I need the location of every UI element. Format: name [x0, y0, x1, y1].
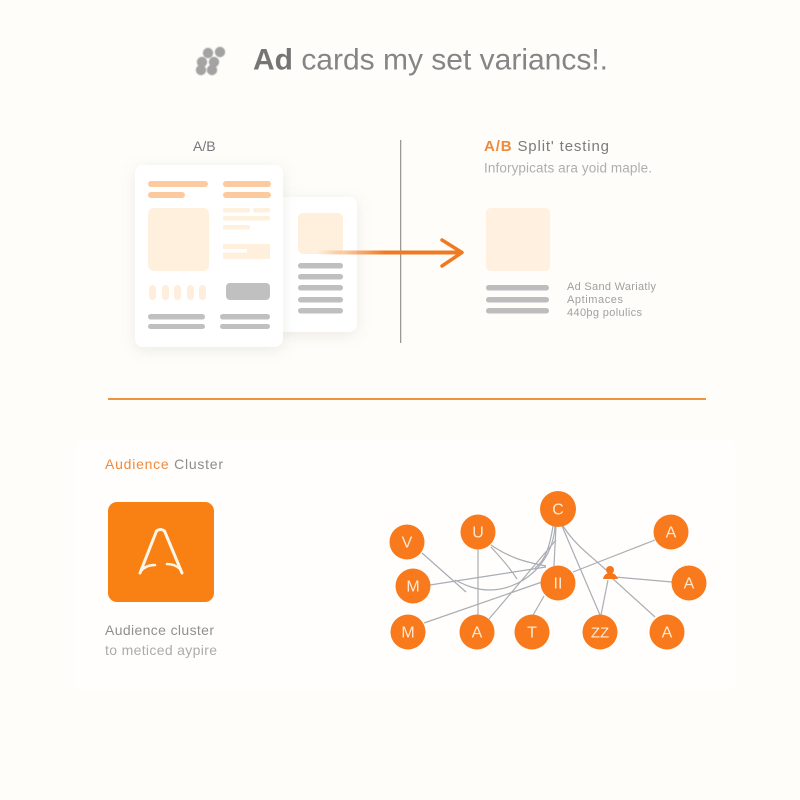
node: T [514, 614, 550, 650]
variant image [486, 208, 550, 271]
node: T: T [527, 624, 537, 642]
secondary card image [298, 213, 343, 254]
node: A lower left: A [472, 624, 483, 642]
node: A lower left [460, 614, 494, 650]
title: Ad cards my set variancs!. [253, 44, 608, 76]
variant text lines [486, 285, 549, 314]
divider: horizontal orange [108, 398, 706, 400]
node: A middle right: A [684, 576, 695, 592]
node: A upper right [654, 514, 688, 550]
node: C: C [552, 502, 564, 518]
caption: subtext: to meticed aypire [105, 642, 217, 658]
node: A lower right: A [662, 624, 673, 642]
subheading: Inforypicats ara yoid maple. [484, 160, 652, 176]
main card button [226, 283, 270, 300]
main card pills [149, 285, 206, 300]
main card copy lines [223, 208, 270, 259]
node: V: V [402, 534, 413, 552]
variant caption [567, 281, 656, 319]
secondary card text lines [298, 263, 343, 314]
variant caption: Ad Sand Wariatly [567, 281, 656, 293]
main card heading bars [148, 181, 271, 198]
node: II: II [554, 576, 562, 592]
node: M upper [396, 568, 430, 604]
icon: person [603, 566, 618, 579]
panel: lower section background [75, 440, 735, 690]
heading: A/B Split testing: A/B Split' testing [484, 138, 609, 155]
node: M lower [390, 614, 426, 650]
node: A middle right [672, 566, 706, 600]
main card image [148, 208, 209, 271]
caption: audience cluster: Audience cluster [105, 622, 214, 638]
node: A upper right: A [666, 524, 677, 542]
node: ZZ: ZZ [591, 624, 609, 642]
variant caption: Aptimaces [567, 294, 624, 306]
variant caption: 440þg polulics [567, 307, 642, 319]
node: II [540, 566, 576, 600]
node: U [460, 514, 496, 550]
node: C [540, 491, 576, 527]
main card footer lines [148, 314, 270, 329]
icon: orange audience tile [108, 502, 214, 602]
network links [422, 526, 672, 623]
panel: secondary ad card [270, 197, 357, 332]
chart: audience network [390, 491, 706, 650]
node: V [390, 524, 424, 560]
arrow [316, 240, 462, 266]
heading: A/B: A/B [193, 138, 216, 154]
node: M lower: M [401, 624, 415, 642]
node: U: U [472, 524, 484, 542]
heading: Audience Cluster: Audience Cluster [105, 456, 223, 472]
icon: hexagon cluster [196, 47, 225, 75]
node: A lower right [650, 614, 684, 650]
node: M upper: M [406, 578, 420, 596]
panel: main ad card [135, 165, 283, 347]
node: ZZ [582, 614, 618, 650]
divider: vertical [400, 140, 401, 343]
